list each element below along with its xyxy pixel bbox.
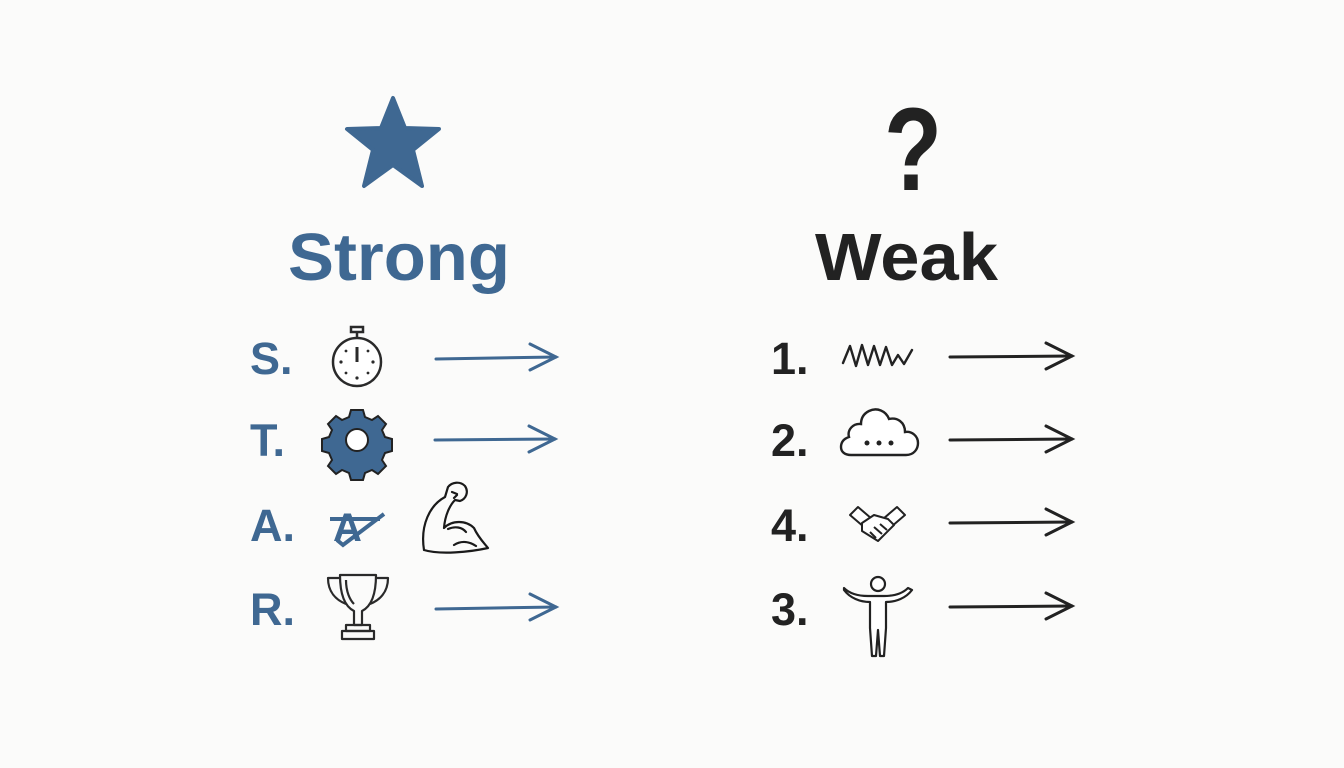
row 2: [771, 409, 1072, 466]
icon: struck A: A: [333, 506, 362, 550]
row S: S.: [250, 333, 293, 384]
row 1: 1.: [771, 333, 809, 384]
row 4: [771, 500, 1072, 551]
icon: person arms open: [844, 577, 912, 656]
heading: Strong: Strong: [288, 220, 510, 295]
row A: [250, 483, 488, 553]
panel: weak: [771, 84, 1072, 656]
panel: strong: [250, 98, 556, 639]
arrow: [950, 593, 1072, 619]
row R: R.: [250, 584, 295, 635]
row R: [250, 575, 556, 639]
arrow: [436, 594, 556, 620]
icon: struck A: [330, 506, 384, 550]
row A: A.: [250, 500, 295, 551]
icon: gear: [322, 410, 392, 480]
icon: trophy: [328, 575, 388, 639]
row 3: [771, 577, 1072, 656]
heading: Weak: Weak: [815, 220, 999, 295]
arrow: [436, 344, 556, 370]
row 3: 3.: [771, 584, 809, 635]
row T: [250, 410, 555, 480]
row S: [250, 327, 556, 386]
icon: flexed arm: [423, 483, 488, 553]
icon: stopwatch: [333, 327, 381, 386]
icon: scribble: [843, 345, 912, 366]
icon: question mark: ?: [884, 84, 942, 216]
icon: star: [347, 98, 439, 186]
arrow: [950, 343, 1072, 369]
row 4: 4.: [771, 500, 809, 551]
row 2: 2.: [771, 415, 809, 466]
row 1: [771, 333, 1072, 384]
icon: cloud: [841, 409, 918, 455]
row T: T.: [250, 415, 285, 466]
arrow: [950, 426, 1072, 452]
arrow: [950, 509, 1072, 535]
arrow: [435, 426, 555, 452]
icon: handshake: [850, 507, 905, 541]
